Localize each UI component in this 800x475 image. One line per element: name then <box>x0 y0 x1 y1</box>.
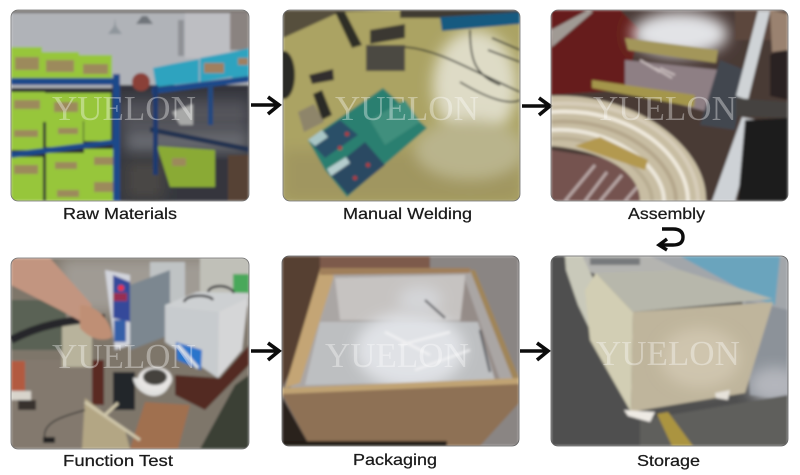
panel: packaging <box>282 256 519 469</box>
photo: sealed plywood crate in warehouse <box>551 256 800 446</box>
crate rim <box>285 270 334 388</box>
soldering iron <box>440 12 520 31</box>
white heater unit <box>164 290 248 314</box>
storage boxes <box>11 47 215 201</box>
watermark: YUELON <box>52 337 196 376</box>
watermark: YUELON <box>52 89 196 128</box>
watermark: YUELON <box>335 89 479 128</box>
main crate <box>596 270 773 312</box>
photo: machine interior with coiled tube <box>551 10 788 201</box>
arrow: manual welding to assembly <box>522 98 550 115</box>
photo: induction heater under test <box>11 258 249 449</box>
heater unit front <box>105 270 130 350</box>
caption: Raw Materials <box>63 206 177 223</box>
blue shelf bins <box>153 48 249 87</box>
watermark: YUELON <box>593 89 737 128</box>
crate front <box>282 384 519 446</box>
arrow: function test to packaging <box>251 343 279 360</box>
small parts <box>309 69 334 84</box>
crate feet <box>624 410 655 422</box>
crate interior <box>290 270 518 390</box>
shelf beams <box>11 74 249 201</box>
copper windings <box>552 149 640 200</box>
arrow: packaging to storage <box>520 343 548 360</box>
crucible and coil <box>62 322 92 367</box>
panel: assembly <box>551 10 788 223</box>
table <box>175 345 249 410</box>
arrow: U-turn from assembly to storage <box>659 229 683 250</box>
panel: function test <box>11 258 249 470</box>
red cylinder <box>11 361 25 391</box>
coiled clear tube <box>551 96 706 201</box>
photo: machine wrapped inside wooden crate <box>282 256 519 446</box>
caption: Manual Welding <box>343 206 472 223</box>
second crate behind <box>563 256 594 328</box>
arrow: raw materials to manual welding <box>251 97 279 114</box>
watermark: YUELON <box>596 334 740 373</box>
arm and hand <box>11 258 92 322</box>
caption: Packaging <box>353 452 437 469</box>
black box <box>366 45 405 71</box>
caption: Storage <box>637 453 700 470</box>
photo: warehouse shelves with storage boxes <box>11 10 249 201</box>
panel: manual welding <box>273 10 525 223</box>
watermark: YUELON <box>325 336 469 375</box>
green circuit boards <box>308 88 427 197</box>
white pillar <box>736 11 770 100</box>
wires <box>405 30 520 102</box>
panel: raw materials <box>11 10 249 223</box>
cable <box>11 318 105 340</box>
yellow floor line <box>657 412 693 446</box>
photo: circuit boards on workbench <box>273 10 525 201</box>
panel: storage <box>551 256 800 470</box>
caption: Assembly <box>628 206 705 223</box>
caption: Function Test <box>63 453 174 470</box>
